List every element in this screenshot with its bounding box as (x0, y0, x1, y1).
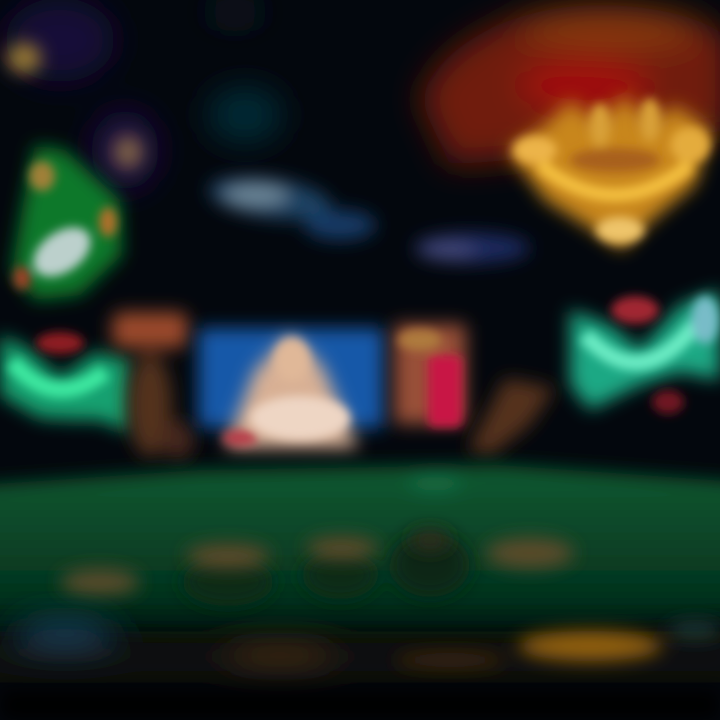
red and amber banner (394, 324, 466, 427)
silhouettes and chips on table (60, 530, 574, 606)
blue sign lights centre (206, 170, 530, 263)
left teal banner (0, 332, 130, 432)
red chandelier canopy (420, 5, 720, 165)
amber lights top left (7, 43, 143, 169)
golden chandelier (508, 95, 712, 250)
teal haze upper centre (205, 1, 283, 143)
table rail with warm reflections (0, 618, 720, 672)
brown left figure (112, 312, 194, 460)
right teal banner (570, 290, 720, 414)
centre blue panel (198, 328, 384, 448)
green felt table (0, 465, 720, 636)
brown right figure (468, 378, 555, 456)
purple haze top left (5, 0, 159, 190)
green mascot figure left (12, 145, 122, 300)
dark floor (0, 690, 720, 720)
